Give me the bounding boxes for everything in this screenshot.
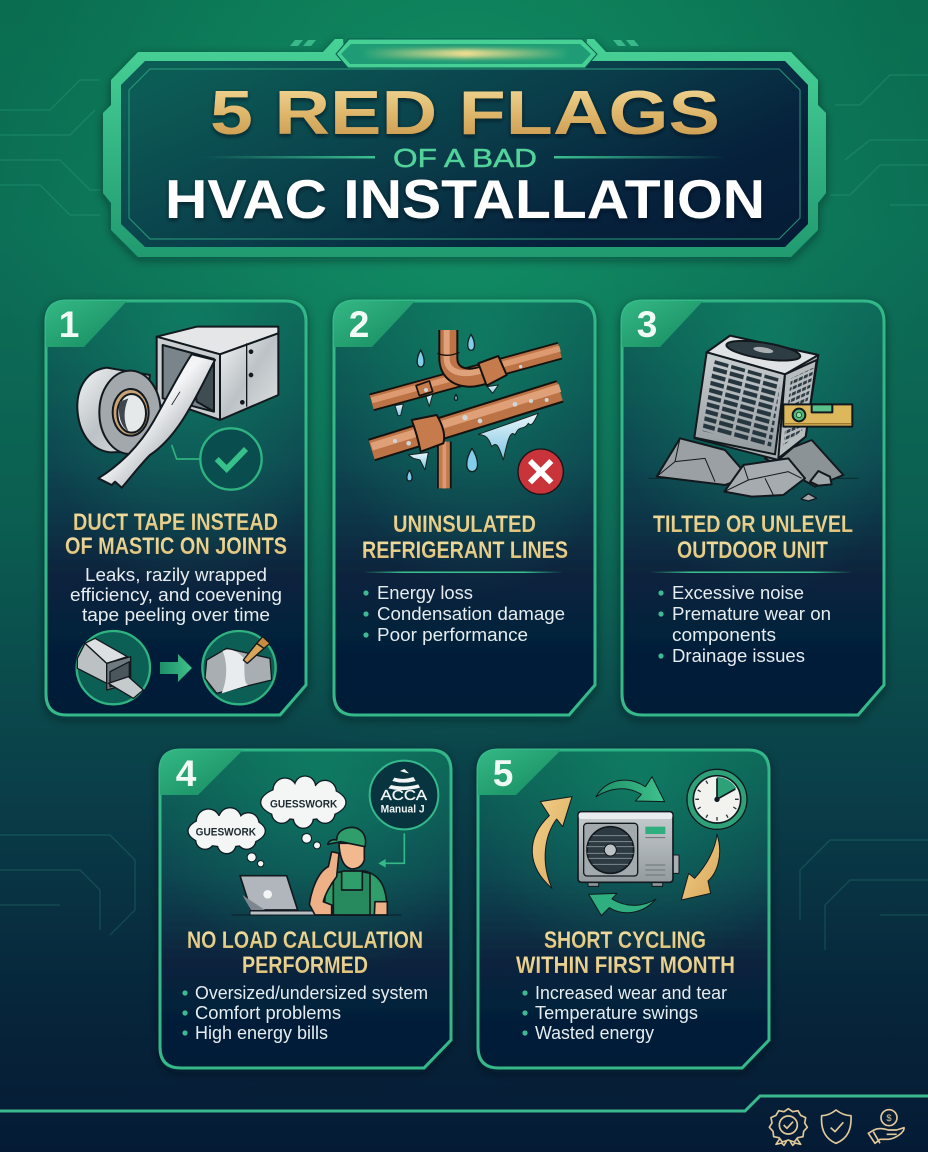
bullet list card 5: Temperature swings (535, 1002, 698, 1023)
icon: hand with dollar coin: $ (886, 1113, 892, 1123)
icon: ACCA Manual J badge: ACCA (381, 788, 427, 804)
icon: taped joint circle (77, 631, 150, 704)
title banner (103, 39, 826, 257)
heading card 3: TILTED OR UNLEVEL (653, 511, 853, 538)
icon: leaking copper pipes (372, 330, 560, 488)
heading card 2: REFRIGERANT LINES (362, 537, 568, 564)
top ornament tab (290, 39, 639, 68)
number badge 3: 3 (637, 304, 657, 345)
number badge 2 (334, 301, 415, 347)
title line: HVAC INSTALLATION: HVAC INSTALLATION (165, 168, 765, 230)
description card 1: Leaks, razily wrapped (85, 564, 267, 585)
number badge 5 (478, 750, 561, 795)
icon: thought clouds: GUESWORK (196, 827, 256, 839)
heading card 3 (653, 511, 853, 564)
bullet list card 4: Comfort problems (195, 1002, 341, 1023)
number badge 1: 1 (59, 304, 79, 345)
panel: card 3 outdoor unit (622, 301, 884, 715)
heading card 1: DUCT TAPE INSTEAD (73, 509, 278, 536)
number badge 2: 2 (349, 304, 369, 345)
number badge 1 (46, 301, 127, 347)
arrow: tape to mastic (160, 654, 192, 682)
number badge 4: 4 (176, 753, 197, 794)
icon: shield check (821, 1110, 851, 1143)
description card 1: tape peeling over time (82, 604, 270, 625)
icon: laptop (232, 876, 402, 915)
icon: thought clouds (187, 775, 347, 867)
heading card 1: OF MASTIC ON JOINTS (65, 533, 287, 560)
number badge 4 (160, 750, 243, 795)
lower copper pipe (372, 388, 560, 452)
icon: check badge (172, 428, 262, 490)
heading card 5: SHORT CYCLING (544, 927, 706, 954)
bullet list card 5 (522, 982, 727, 1043)
bullet list card 5: Increased wear and tear (535, 982, 727, 1003)
panel: card 4 load calculation (160, 750, 451, 1068)
icon: thought clouds: GUESSWORK (270, 798, 338, 810)
title line: OF A BAD: OF A BAD (393, 143, 537, 173)
bullet list card 3: Excessive noise (672, 582, 804, 603)
bullet list card 4 (182, 982, 428, 1043)
icon: mastic joint circle (202, 631, 276, 704)
number badge 5: 5 (493, 753, 513, 794)
heading card 2: UNINSULATED (393, 511, 536, 538)
upper copper pipe (372, 349, 560, 402)
description card 1 (70, 564, 282, 625)
icon: hand with dollar coin (868, 1110, 904, 1143)
icon: mini-split outdoor unit (578, 812, 679, 886)
banner inner panel (121, 61, 808, 247)
footer line (0, 1096, 928, 1111)
bullet list card 4: High energy bills (195, 1022, 328, 1043)
ice (395, 385, 538, 470)
bullet list card 4: Oversized/undersized system (195, 982, 428, 1003)
panel: card 5 short cycling (478, 750, 769, 1068)
heading card 4: PERFORMED (242, 952, 368, 979)
icon: award medal (769, 1109, 807, 1145)
heading card 4: NO LOAD CALCULATION (187, 927, 423, 954)
heading card 2 (362, 511, 568, 564)
icon: cycle arrows (532, 777, 720, 916)
bullet list card 5: Wasted energy (535, 1022, 655, 1043)
bullet list card 3: Drainage issues (672, 645, 805, 666)
bullet list card 3: components (672, 624, 776, 645)
bullet list card 2 (363, 582, 565, 645)
heading card 5 (516, 927, 735, 979)
icon: ACCA Manual J badge: Manual J (381, 804, 425, 816)
elbow fitting (416, 330, 507, 396)
bullet list card 3 (658, 582, 831, 666)
icon: clock (687, 769, 747, 829)
description card 1: efficiency, and coevening (70, 584, 282, 605)
heading card 5: WITHIN FIRST MONTH (516, 952, 735, 979)
icon: duct and tape roll (77, 327, 278, 488)
icon: confused technician (309, 827, 387, 915)
banner frame (103, 39, 826, 257)
icon: tilted condenser on rocks (648, 336, 858, 501)
bullet list card 2: Energy loss (377, 582, 473, 603)
icon: red X badge (518, 449, 563, 494)
title line: 5 RED FLAGS: 5 RED FLAGS (210, 79, 720, 148)
number badge 3 (622, 301, 703, 347)
heading card 3: OUTDOOR UNIT (677, 537, 828, 564)
bullet list card 2: Poor performance (377, 624, 528, 645)
heading card 1 (65, 509, 287, 560)
icon: spirit level (783, 404, 852, 427)
bullet list card 3: Premature wear on (672, 603, 831, 624)
heading card 4 (187, 927, 423, 979)
panel: card 1 duct tape (46, 301, 306, 715)
icon: ACCA Manual J badge (370, 761, 438, 868)
panel: card 2 refrigerant lines (334, 301, 595, 715)
bullet list card 2: Condensation damage (377, 603, 565, 624)
